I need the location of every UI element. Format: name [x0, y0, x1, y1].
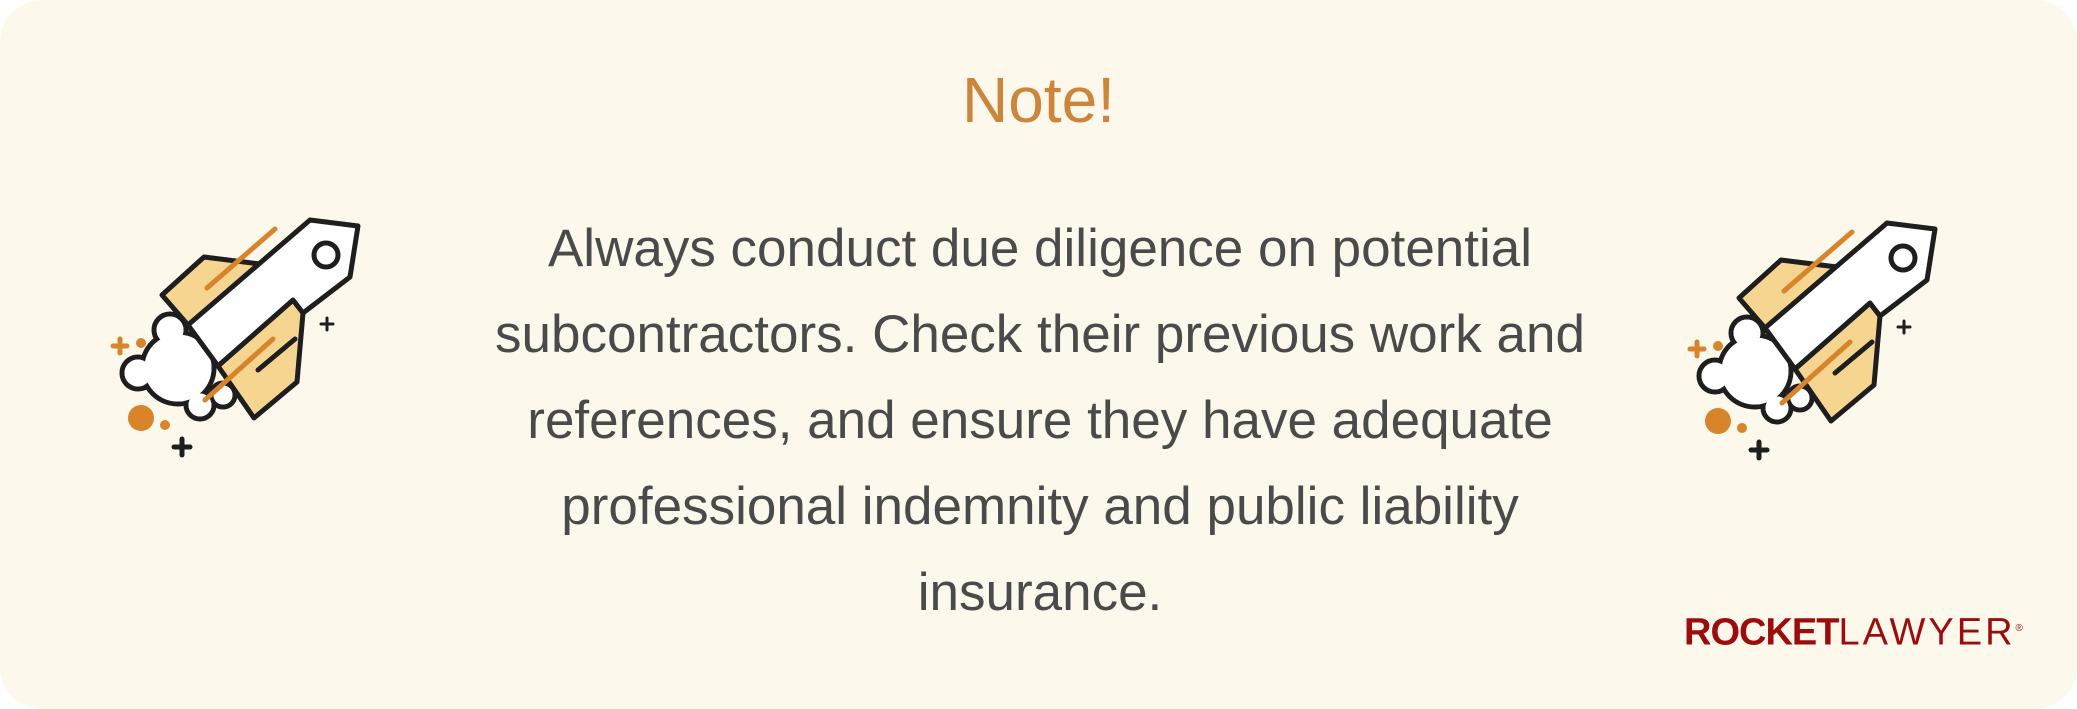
- body text: Always conduct due diligence on potential: [548, 219, 1532, 278]
- icon: left rocket: [110, 218, 360, 458]
- icon: right rocket: [1688, 220, 1938, 460]
- body text: professional indemnity and public liability: [561, 477, 1519, 536]
- logo: ROCKETLAWYER®: [1684, 612, 2023, 654]
- body text: references, and ensure they have adequate: [527, 391, 1553, 450]
- body text: subcontractors. Check their previous work and: [495, 305, 1585, 364]
- title: Note!: [962, 64, 1115, 136]
- body text: [495, 219, 1585, 622]
- body text: insurance.: [918, 563, 1162, 622]
